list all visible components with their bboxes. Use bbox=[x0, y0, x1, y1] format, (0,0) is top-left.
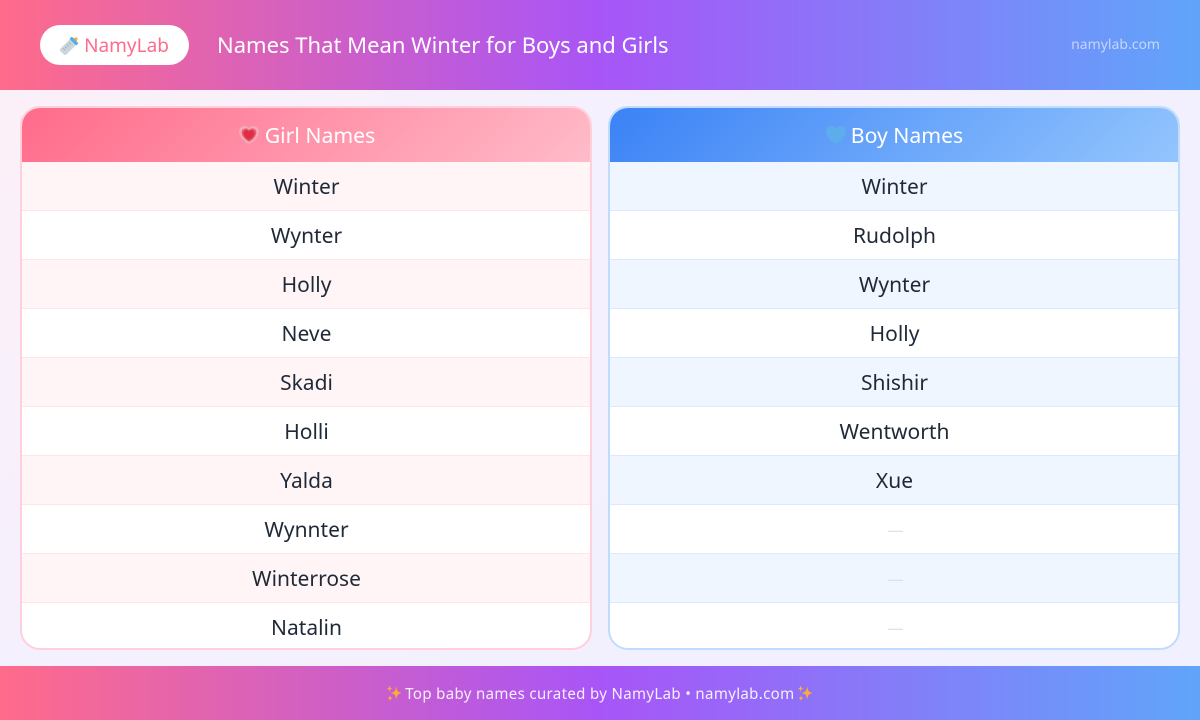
name: Winter: Winter bbox=[273, 173, 340, 201]
name: Wynter: Wynter bbox=[271, 222, 342, 250]
panel: boy names bbox=[608, 106, 1180, 650]
name: Wentworth: Wentworth bbox=[840, 418, 949, 446]
name: Xue: Xue bbox=[876, 467, 913, 495]
name: Wynnter bbox=[22, 505, 590, 554]
name: Holli bbox=[22, 407, 590, 456]
name: Holly bbox=[610, 309, 1178, 358]
header bar bbox=[0, 0, 1200, 90]
name: Holly: Holly bbox=[282, 271, 331, 299]
boy names heading bbox=[610, 108, 1178, 162]
name: Winterrose: Winterrose bbox=[252, 565, 361, 593]
icon: sparkles left bbox=[387, 686, 402, 701]
name: Wentworth bbox=[610, 407, 1178, 456]
logo badge bbox=[40, 25, 189, 65]
name: Winter bbox=[610, 162, 1178, 211]
icon: blue heart bbox=[826, 126, 846, 144]
name: Wynter bbox=[610, 260, 1178, 309]
name: Winter bbox=[22, 162, 590, 211]
name: Yalda bbox=[22, 456, 590, 505]
name: Rudolph: Rudolph bbox=[853, 222, 936, 250]
name: Holly: Holly bbox=[870, 320, 919, 348]
name: Wynter bbox=[22, 211, 590, 260]
icon: baby bottle bbox=[60, 36, 78, 55]
name: Winterrose bbox=[22, 554, 590, 603]
name: Winter: Winter bbox=[861, 173, 928, 201]
website label: namylab.com bbox=[1071, 35, 1160, 54]
name: Natalin: Natalin bbox=[271, 614, 342, 642]
name: Natalin bbox=[22, 603, 590, 652]
name: Wynnter: Wynnter bbox=[264, 516, 349, 544]
name: Rudolph bbox=[610, 211, 1178, 260]
icon: growing heart bbox=[239, 126, 259, 144]
boy names heading: Boy Names bbox=[851, 121, 963, 150]
girl names heading bbox=[22, 108, 590, 162]
footer bar: Top baby names curated by NamyLab • namylab.com bbox=[405, 684, 794, 704]
name: Wynter: Wynter bbox=[859, 271, 930, 299]
empty row placeholder bbox=[610, 505, 1178, 554]
name: Holli: Holli bbox=[284, 418, 329, 446]
name: Xue bbox=[610, 456, 1178, 505]
name: Shishir: Shishir bbox=[861, 369, 928, 397]
name: Neve: Neve bbox=[282, 320, 331, 348]
icon: sparkles right bbox=[798, 686, 812, 701]
name: Neve bbox=[22, 309, 590, 358]
girl names heading: Girl Names bbox=[265, 121, 375, 150]
name: Skadi bbox=[22, 358, 590, 407]
empty row placeholder: — bbox=[887, 617, 904, 639]
name: Holly bbox=[22, 260, 590, 309]
name: Shishir bbox=[610, 358, 1178, 407]
logo badge: NamyLab bbox=[84, 32, 169, 58]
empty row placeholder bbox=[610, 554, 1178, 603]
name: Yalda: Yalda bbox=[280, 467, 333, 495]
name: Skadi: Skadi bbox=[280, 369, 333, 397]
title: Names That Mean Winter for Boys and Girls bbox=[217, 30, 669, 60]
empty row placeholder: — bbox=[887, 568, 904, 590]
empty row placeholder bbox=[610, 603, 1178, 652]
panel: girl names bbox=[20, 106, 592, 650]
empty row placeholder: — bbox=[887, 519, 904, 541]
footer bar bbox=[0, 666, 1200, 720]
